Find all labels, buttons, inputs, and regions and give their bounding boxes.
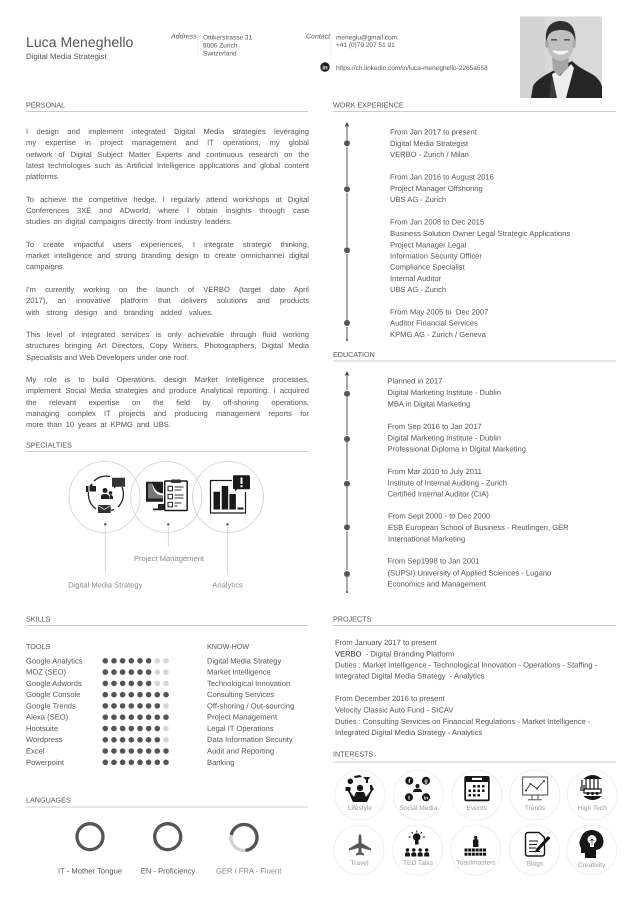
text: work experience entries: From Jan 2017 to present (390, 128, 478, 136)
label: analytics: Analytics (212, 580, 243, 590)
icon: project management (146, 480, 187, 510)
list: tools: Hootsuite (26, 724, 58, 733)
ring: english (155, 824, 181, 850)
list: tools (26, 656, 83, 767)
text: project verbo: VERBO - Digital Branding Platform (335, 650, 454, 658)
label: toastmasters: Toastmasters (456, 860, 496, 866)
list: tools: Powerpoint (26, 758, 65, 767)
text block: personal statement: with strong design and branding added values. (26, 308, 213, 317)
text: education entries: From Sep1998 to Jan 2001 (388, 556, 480, 566)
icon: creativity (579, 830, 604, 858)
text block: personal statement: managing complex IT projects and producing management reports for (26, 409, 309, 418)
text block: personal statement: campaigns. (26, 262, 65, 271)
panel: work timeline (344, 122, 350, 341)
text: project verbo: From January 2017 to present (335, 638, 438, 647)
label: german and french: GER / FRA - Fluent (216, 866, 282, 875)
heading: interests: INTERESTS (333, 750, 374, 758)
text: project velocity (335, 694, 591, 737)
text: education entries: Digital Marketing Institute - Dublin (388, 434, 501, 442)
list: know-how: Banking (207, 758, 234, 767)
text block: personal statement: To achieve the competitive hedge, I regularly attend workshops at Digital (26, 195, 309, 204)
label: english: EN - Proficiency (141, 866, 195, 875)
heading: languages: LANGUAGES (26, 796, 71, 804)
text: work experience entries: UBS AG - Zurich (390, 195, 446, 204)
text: work experience entries: VERBO - Zurich / Milan (390, 150, 469, 159)
list: tools: Google Console (26, 690, 80, 699)
text: project verbo: Integrated Digital Media Strategy - Analytics (335, 672, 485, 680)
panel: interests (334, 770, 617, 875)
heading: skills: SKILLS (26, 614, 51, 624)
text: education entries: Digital Marketing Institute - Dublin (388, 388, 501, 397)
text block: personal statement: the relevant expertise on the field by off-shoring operations, (26, 398, 309, 407)
text: work experience entries: Project Manager Offshoring (390, 184, 483, 193)
panel: education timeline (344, 371, 350, 593)
list: know-how: Data Information Security (207, 735, 293, 744)
list: tools: Google Adwords (26, 679, 82, 688)
text: education entries: From Sep 2016 to Jan 2017 (388, 422, 482, 431)
text block: personal statement: My role is to build Operations, design Market Intelligence processes, (26, 375, 309, 384)
text block: personal statement: 2017), an innovative platform that delivers solutions and products (26, 296, 309, 305)
text: work experience entries: Project Manager Legal (390, 240, 467, 250)
text block: personal statement: latest technologies such as Artificial Intelligence applications and global content (26, 161, 309, 170)
icon: social media: f (408, 778, 411, 785)
text block: personal statement: I'm currently working on the launch of VERBO (target date April (26, 285, 309, 294)
text: work experience entries: Internal Auditor (390, 274, 442, 283)
list: know-how: Technological Innovation (207, 679, 290, 688)
connector: project management (167, 523, 170, 547)
list: tools: Excel (26, 746, 45, 756)
list: tools: Google Analytics (26, 656, 83, 665)
heading: tools: TOOLS (26, 642, 50, 651)
icon: social media: in (424, 795, 428, 801)
text: work experience entries (390, 128, 570, 339)
list: tools: Wordpress (26, 735, 63, 744)
list: know-how: Legal IT Operations (207, 724, 274, 733)
list: tools: Google Trends (26, 701, 76, 710)
heading: know-how: KNOW-HOW (207, 642, 249, 651)
list: tools: Alexa (SEO) (26, 713, 69, 722)
linkedin url: https://ch.linkedin.com/in/luca-meneghello-2265a658 (336, 65, 488, 72)
text: work experience entries: From May 2005 to Dec 2007 (390, 308, 488, 316)
icon: toastmasters (464, 836, 486, 856)
label: ted talks: TED Talks (403, 860, 434, 867)
heading: work experience: WORK EXPERIENCE (333, 100, 404, 110)
diagram: specialties circles (68, 462, 264, 590)
text block: personal statement: To create impactful users experiences, I integrate strategic thinking, (26, 240, 309, 249)
text block: personal statement: Specialists and Web Developers under one roof. (26, 353, 189, 362)
text: work experience entries: UBS AG - Zurich (390, 285, 446, 294)
contact block: Contact (306, 34, 331, 40)
address block: 8006 Zurich (203, 43, 238, 50)
icon: high tech (580, 775, 605, 800)
text: work experience entries: Business Solution Owner Legal Strategic Applications (390, 229, 570, 238)
label: lifestyle: Lifestyle (348, 805, 372, 812)
address block: Ottikerstrasse 31 (203, 35, 253, 42)
text: education entries: Professional Diploma in Digital Marketing (388, 444, 526, 454)
icon: trends (523, 777, 548, 800)
heading: specialties: SPECIALTIES (26, 440, 72, 450)
name and title (26, 34, 134, 61)
text: work experience entries: From Jan 2008 to Dec 2015 (390, 218, 484, 226)
list: know-how: Off-shoring / Out-sourcing (207, 701, 294, 710)
text block: personal statement: structures bringing Art Directors, Copy Writers, Photographers, Digital Media (26, 341, 309, 350)
icon: lifestyle (346, 775, 374, 802)
text: project velocity: Velocity Classic Auto Fund - SICAV (335, 706, 454, 714)
label: trends: Trends (525, 805, 546, 812)
text: education entries: ESB European School of Business - Reutlingen, GER (388, 523, 569, 532)
label: digital media strategy: Digital Media Strategy (68, 580, 143, 590)
text: work experience entries: Auditor Financial Services (390, 318, 478, 328)
ring: german and french (231, 824, 257, 850)
text block: personal statement: market intelligence and strong branding design to create omnichannel digital (26, 251, 309, 260)
list: know-how: Market Intelligence (207, 668, 271, 677)
icon: events (464, 776, 490, 801)
icon: linkedin: in (322, 64, 328, 71)
icon: linkedin (320, 62, 330, 72)
icon: ted talks (405, 830, 429, 856)
text block: personal statement: my expertise in project management and IT operations, my global (26, 138, 309, 147)
text: work experience entries: From Jan 2016 to August 2016 (390, 172, 494, 182)
text: work experience entries: Compliance Specialist (390, 262, 466, 272)
text: project verbo (335, 638, 598, 680)
rating dots: tools (102, 658, 169, 765)
icon: social media: t (408, 795, 410, 801)
label: project management: Project Management (134, 554, 205, 563)
text block: personal statement: more than 10 years at KPMG and UBS. (26, 420, 171, 429)
label: high tech: High Tech (578, 805, 607, 812)
text: work experience entries: Information Security Officer (390, 252, 482, 260)
heading: education: EDUCATION (333, 350, 375, 359)
text: project velocity: Integrated Digital Media Strategy - Analytics (335, 728, 483, 737)
text block: personal statement: implement Social Media strategies and produce Analytical reporting. I acquired (26, 386, 309, 395)
text: project velocity: From December 2016 to present (335, 694, 446, 703)
label: social media: Social Media (399, 805, 438, 812)
text block: personal statement: Conferences 3XE and ADworld, where I obtain insights through case (26, 206, 309, 215)
ring: italian (77, 824, 103, 850)
text block: personal statement: studies on digital campaigns directly from industry leaders. (26, 217, 232, 226)
list: know-how (207, 656, 294, 767)
address block: Address (170, 32, 197, 40)
text: education entries: International Marketing (388, 534, 465, 544)
icon: analytics (210, 475, 250, 513)
icon: travel (349, 834, 371, 856)
text: work experience entries: KPMG AG - Zurich / Geneva (390, 330, 487, 339)
label: travel: Travel (350, 860, 369, 867)
contact block: +41 (0)79 207 51 91 (336, 42, 395, 49)
name and title: Digital Media Strategist (26, 52, 107, 61)
photo (520, 16, 602, 98)
list: know-how: Consulting Services (207, 690, 274, 699)
text: education entries: From Mar 2010 to July 2011 (388, 467, 482, 476)
connector: digital media strategy (104, 523, 107, 573)
label: italian: IT - Mother Tongue (58, 866, 122, 875)
label: blogs: Blogs (527, 860, 544, 868)
address block: Switzerland (203, 51, 237, 58)
text: education entries: From Sept 2000 - to Dec 2000 (388, 512, 490, 520)
text: education entries: Institute of Internal Auditing - Zurich (388, 478, 507, 488)
text: project verbo: Duties : Market Intelligence - Technological Innovation - Operations - Staffing - (335, 660, 598, 669)
text block: personal statement: This level of integrated services is only achievable through fluid working (26, 330, 309, 339)
heading: personal: PERSONAL (26, 100, 65, 110)
text block: personal statement: platforms. (26, 172, 59, 181)
text block: personal statement: I design and implement integrated Digital Media strategies leveraging (26, 127, 309, 136)
icon: digital media (86, 476, 125, 513)
icon: blogs (526, 832, 550, 856)
contact block: meneglu@gmail.com (336, 35, 397, 42)
icon: social media (405, 777, 430, 801)
list: know-how: Digital Media Strategy (207, 656, 281, 665)
heading: projects: PROJECTS (333, 614, 372, 624)
label: events: Events (467, 805, 487, 812)
text: education entries: Economics and Management (388, 580, 487, 588)
text block: personal statement: network of Digital Subject Matter Experts and continuous research on the (26, 150, 309, 159)
icon: social media: g (424, 779, 428, 785)
text: project velocity: Duties : Consulting Services on Financial Regulations - Market Intelligence - (335, 717, 591, 726)
text block: personal statement (26, 127, 309, 429)
text: education entries: Certified Internal Auditor (CIA) (388, 490, 489, 498)
list: tools: MOZ (SEO) (26, 668, 67, 677)
list: know-how: Project Management (207, 713, 278, 722)
label: creativity: Creativity (578, 862, 606, 869)
text: education entries (388, 376, 569, 588)
text: work experience entries: Digital Media Strategist (390, 139, 469, 148)
connector: analytics (226, 523, 229, 574)
text: education entries: MBA in Digital Marketing (388, 400, 470, 408)
contact block (306, 34, 397, 55)
list: know-how: Audit and Reporting (207, 746, 274, 756)
address block (170, 32, 253, 58)
text: education entries: Planned in 2017 (388, 376, 442, 386)
text: education entries: (SUPSI) University of Applied Sciences - Lugano (388, 568, 551, 578)
name and title: Luca Meneghello (26, 34, 134, 50)
